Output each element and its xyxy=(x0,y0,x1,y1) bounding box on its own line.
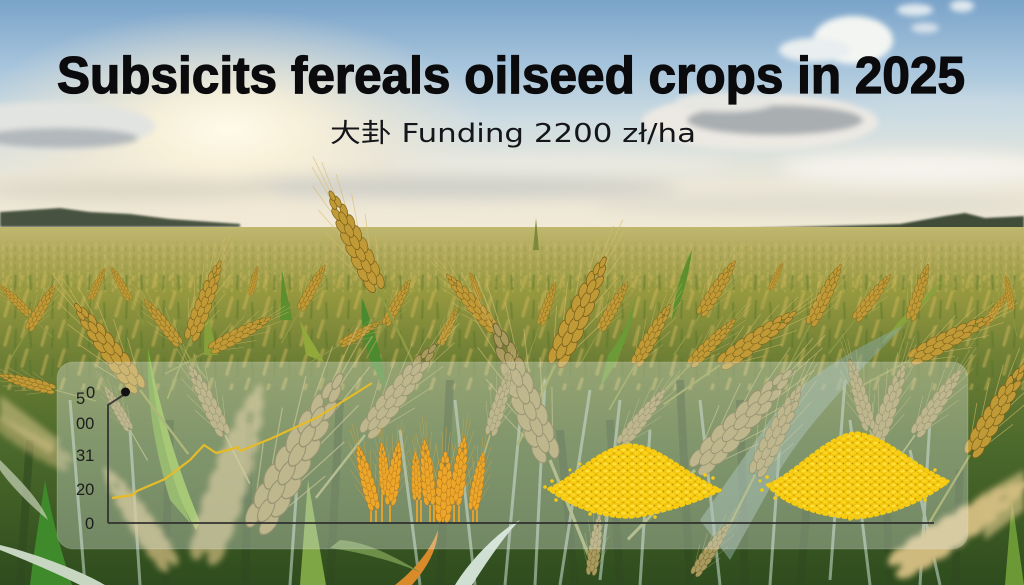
background: sky xyxy=(0,0,1024,235)
blurred foreground ears xyxy=(0,377,1024,585)
axes xyxy=(108,394,934,523)
icon: wheat sheaf xyxy=(339,412,498,524)
field base xyxy=(0,227,1024,585)
wheat ears: mid and back rows xyxy=(0,227,1024,420)
y-axis labels: 0 xyxy=(85,515,94,533)
trend line xyxy=(112,383,372,498)
title: Subsicits fereals oilseed crops in 2025 xyxy=(57,46,965,104)
mid-field crop xyxy=(0,275,1024,390)
treeline xyxy=(0,208,1024,232)
line chart xyxy=(76,383,934,533)
y-axis labels: 00 xyxy=(76,415,94,433)
green leaf blades xyxy=(148,348,200,530)
y-axis labels: 31 xyxy=(76,447,94,465)
y-axis labels: 5 xyxy=(76,390,85,408)
y-axis labels xyxy=(76,384,95,533)
subtitle: 大卦 Funding 2200 zł/ha xyxy=(330,119,696,149)
axis end dot xyxy=(121,388,130,396)
clouds xyxy=(0,0,1024,214)
icon: right pile of yellow seeds xyxy=(758,433,948,521)
wheat ears: front row xyxy=(0,147,1024,583)
icon: left pile of yellow seeds xyxy=(543,445,720,519)
leaves and stems xyxy=(0,218,1024,585)
distant crop rows xyxy=(0,242,1024,292)
y-axis labels: 0 xyxy=(86,384,95,402)
y-axis labels: 20 xyxy=(76,481,94,499)
sun glow xyxy=(0,10,488,250)
panel: translucent chart overlay xyxy=(57,362,968,549)
